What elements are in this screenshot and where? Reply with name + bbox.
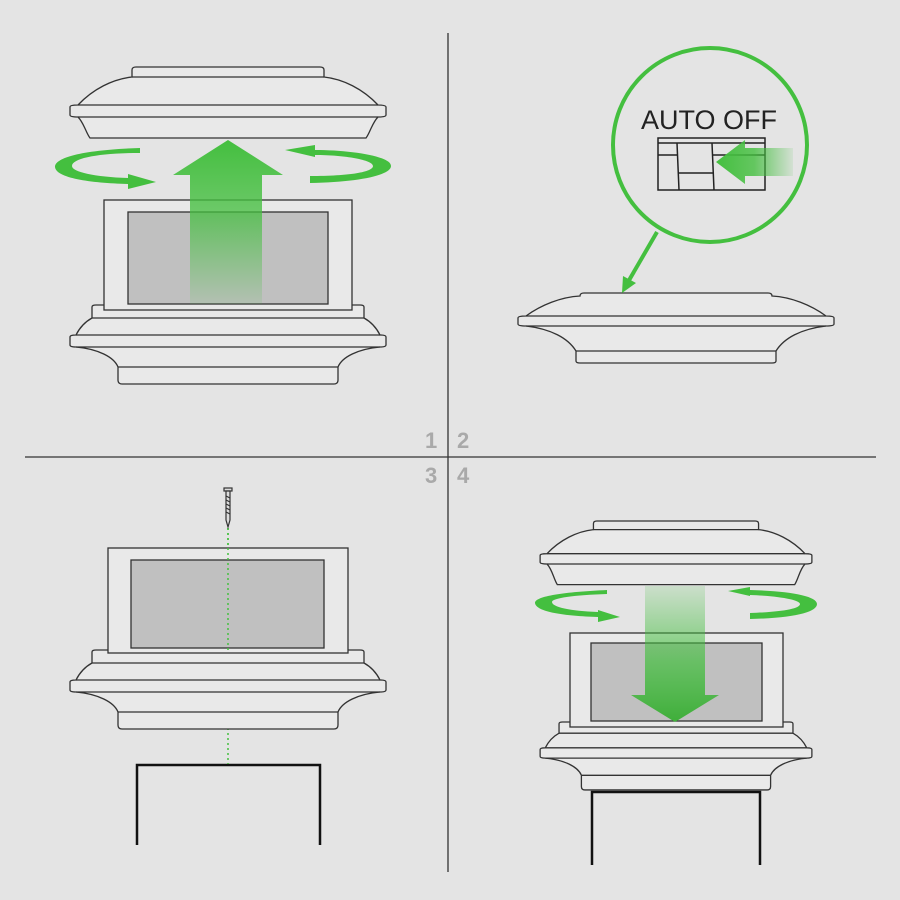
body 3 — [108, 548, 348, 653]
cap 4 — [540, 521, 812, 585]
step numbers — [425, 428, 470, 488]
step numbers: 1 — [425, 428, 437, 453]
cap 1 — [70, 67, 386, 138]
panel 2: switch — [518, 48, 834, 363]
arrow: up — [173, 140, 283, 304]
callout circle — [613, 48, 807, 293]
body 1 — [104, 200, 352, 310]
step numbers: 3 — [425, 463, 437, 488]
arrow: rotate right — [285, 145, 391, 183]
panel 4: replace cap — [535, 521, 817, 865]
panel 3: mount — [70, 488, 386, 845]
arrow: rotate left — [55, 148, 156, 189]
switch — [658, 138, 765, 190]
screw — [224, 488, 232, 527]
arrow: rotate left 4 — [535, 590, 620, 622]
arrow: rotate right 4 — [728, 587, 817, 619]
arrow: down — [631, 586, 719, 722]
panel 1: remove cap — [55, 67, 391, 384]
step numbers: 4 — [457, 463, 470, 488]
dotted guide — [227, 528, 229, 764]
step numbers: 2 — [457, 428, 469, 453]
switch label: AUTO OFF — [641, 105, 777, 135]
body 4 — [570, 633, 783, 727]
cap 2 — [518, 293, 834, 363]
post — [137, 765, 320, 845]
base 1 — [70, 305, 386, 384]
base 3 — [70, 650, 386, 729]
post 4 — [592, 792, 760, 865]
base 4 — [540, 722, 812, 790]
arrow: push — [716, 140, 793, 184]
